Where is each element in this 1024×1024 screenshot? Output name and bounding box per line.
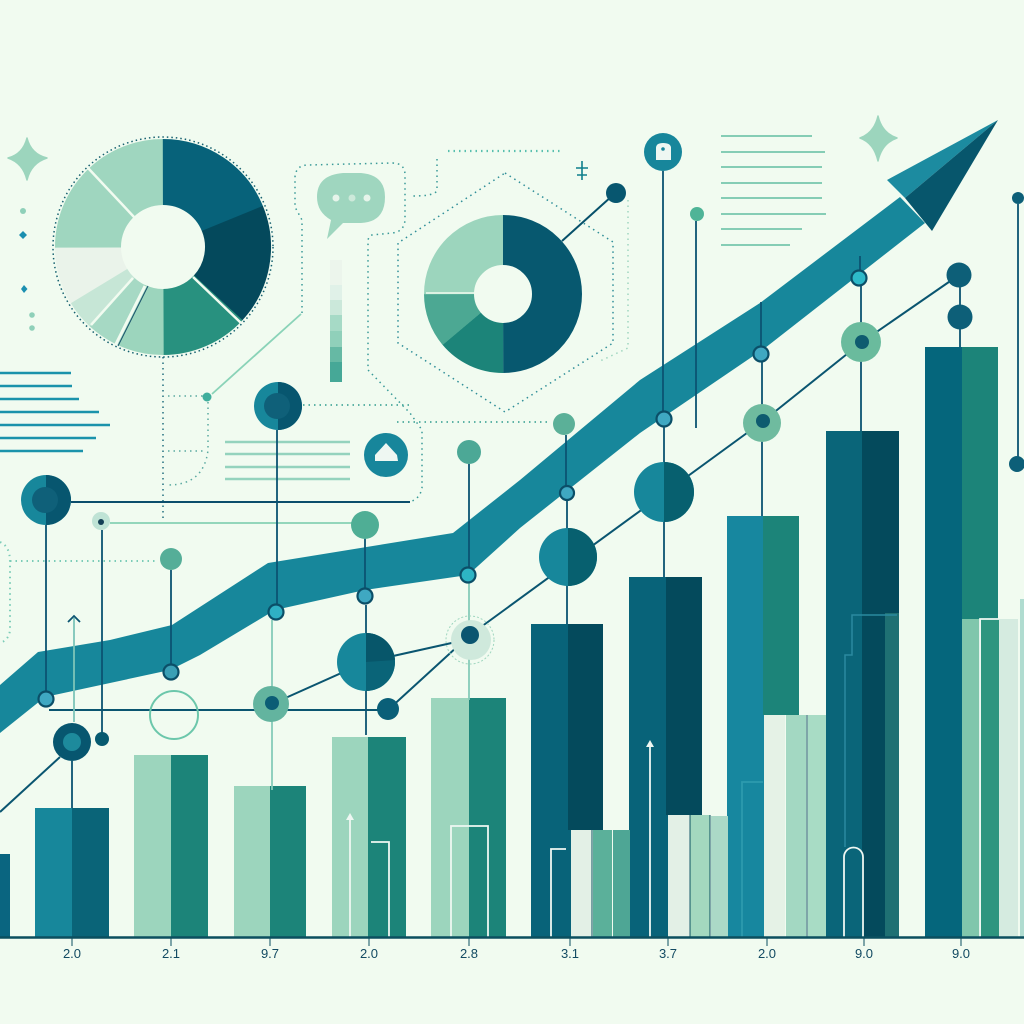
node: upper split circle [254,382,302,430]
nodes: green pin heads [160,207,704,570]
axis labels: 2.0 [758,946,776,961]
node: left large split circle [21,475,71,525]
decorative dotted connectors [0,151,628,643]
nodes: blue markers on arrow [38,270,866,706]
icon: callout pin on small donut [562,183,626,241]
panel: small donut chart [426,218,579,370]
axis labels [63,946,970,961]
connector with green node [202,314,301,402]
axis labels: 2.1 [162,946,180,961]
axis labels: 2.8 [460,946,478,961]
axis labels: 9.0 [952,946,970,961]
icon: ring outline [150,691,198,739]
trend lines [0,275,959,812]
icon: speech bubble [317,173,385,239]
axis labels: 3.7 [659,946,677,961]
x axis [0,938,1024,946]
wide growth arrow shaft [0,197,925,733]
pins: vertical stems [46,171,1018,808]
axis labels: 9.7 [261,946,279,961]
axis labels: 9.0 [855,946,873,961]
axis labels: 2.0 [63,946,81,961]
icon: large sparkle [8,138,47,180]
axis labels: 2.0 [360,946,378,961]
decorative dots [19,208,35,331]
axis labels: 3.1 [561,946,579,961]
node: dark end point [377,698,399,720]
node: left dark circle [53,723,109,761]
bar overlay outlines [346,615,999,937]
text block: right lines [721,136,826,245]
growth arrow head [887,120,998,231]
legend: gradient scale [330,260,342,382]
icon: house badge [364,433,408,477]
node: small light target [92,512,110,530]
panel: large donut chart [53,137,273,357]
node: halo center [446,616,494,664]
icon: right sparkle [860,116,897,161]
bar chart [0,347,1024,937]
nodes: right end circles [946,192,1024,472]
icon: small plus marks [576,161,588,180]
text block: blue lines [0,373,110,451]
nodes: green halos right [743,322,881,442]
icon: lock badge [644,133,682,171]
text block: middle lines [225,442,350,479]
node: big split circles [337,462,694,691]
node: green halo left [253,686,289,722]
